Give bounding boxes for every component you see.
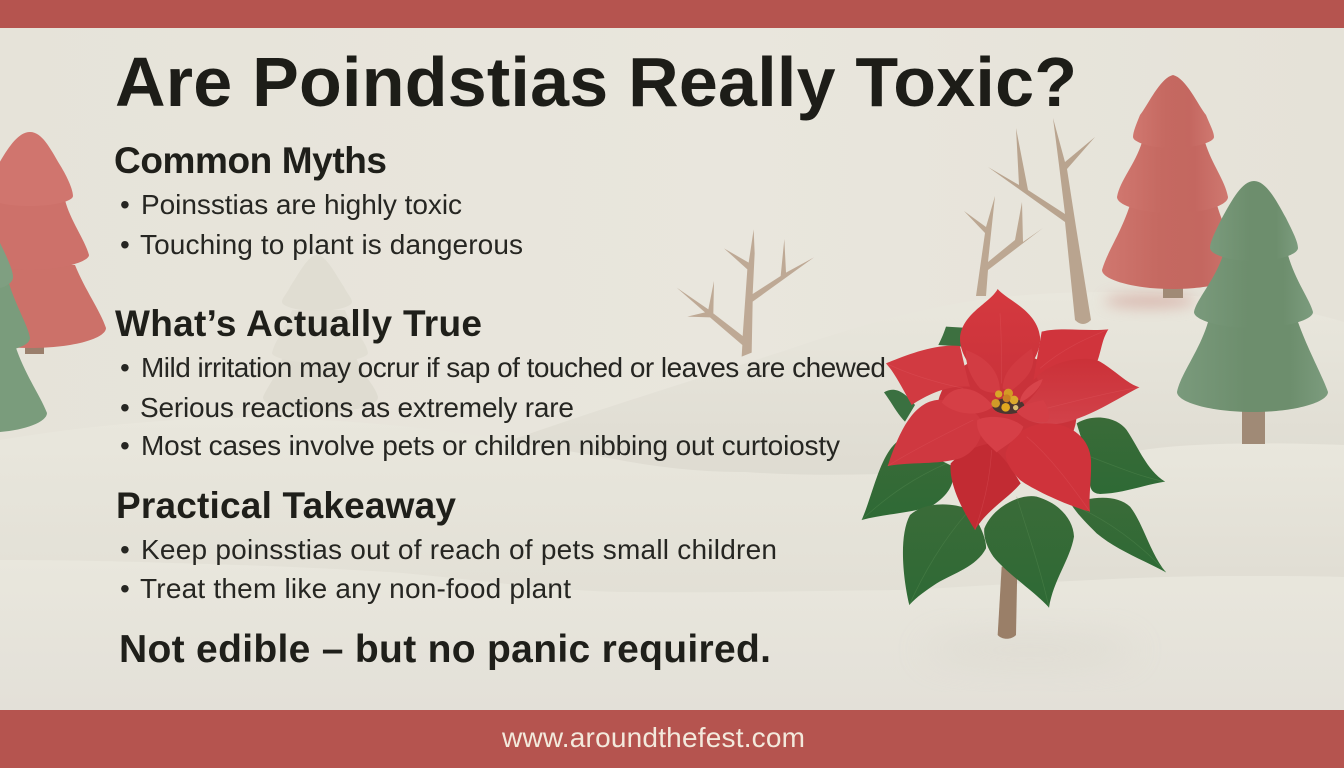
section: what's actually true: What’s Actually True [115, 303, 482, 344]
section: common myths: Common Myths [114, 140, 387, 181]
flower stamens [991, 389, 1018, 412]
red bracts [1033, 329, 1108, 380]
tree: left red [0, 132, 106, 354]
website url: www.aroundthefest.com [501, 722, 805, 753]
section: practical takeaway: Practical Takeaway [116, 485, 456, 526]
section: what's actually true [115, 303, 886, 461]
poinsettia plant [862, 289, 1166, 664]
leaf veins [862, 457, 1166, 608]
bract veins [886, 313, 1139, 530]
section: what's actually true: Mild irritation may ocrur if sap of touched or leaves are chewed [141, 352, 886, 383]
green leaves [862, 327, 1166, 608]
section: practical takeaway [116, 485, 777, 604]
section: common myths [114, 140, 523, 260]
section: common myths: Poinsstias are highly toxic [141, 189, 462, 220]
section: practical takeaway: • [120, 534, 130, 565]
tree: left green [0, 243, 47, 432]
section: practical takeaway: Keep poinsstias out of reach of pets small children [141, 534, 777, 565]
section: what's actually true: • [120, 430, 130, 461]
section: what's actually true: Serious reactions as extremely rare [140, 392, 574, 423]
poinsettia artwork [862, 289, 1166, 639]
bottom banner [0, 710, 1344, 768]
bare tree: center [677, 229, 814, 357]
flower centre backing [992, 398, 1024, 414]
section: practical takeaway: Treat them like any non-food plant [140, 573, 571, 604]
hill: left middle [0, 418, 1344, 710]
section: common myths: • [120, 189, 130, 220]
bare tree: small right [964, 196, 1043, 296]
tree: right green [1177, 181, 1328, 444]
hill: back [430, 292, 1344, 600]
inner bracts [942, 348, 1049, 452]
section: common myths: Touching to plant is dangerous [140, 229, 523, 260]
top banner [0, 0, 1344, 28]
bare tree: large right [988, 118, 1095, 324]
bract base [937, 353, 1077, 473]
stem [998, 567, 1017, 639]
plant shadow [920, 636, 1140, 664]
section: common myths: • [120, 229, 130, 260]
title: Are Poindstias Really Toxic? [115, 43, 1077, 121]
hill: front [0, 560, 1344, 710]
hill: right middle [1000, 443, 1344, 620]
closing statement: Not edible – but no panic required. [119, 628, 771, 671]
section: practical takeaway: • [120, 573, 130, 604]
section: what's actually true: • [120, 352, 130, 383]
section: what's actually true: • [120, 392, 130, 423]
tree: faint background [263, 255, 378, 412]
tree: right red [1102, 75, 1244, 308]
section: what's actually true: Most cases involve pets or children nibbing out curtoiosty [141, 430, 840, 461]
